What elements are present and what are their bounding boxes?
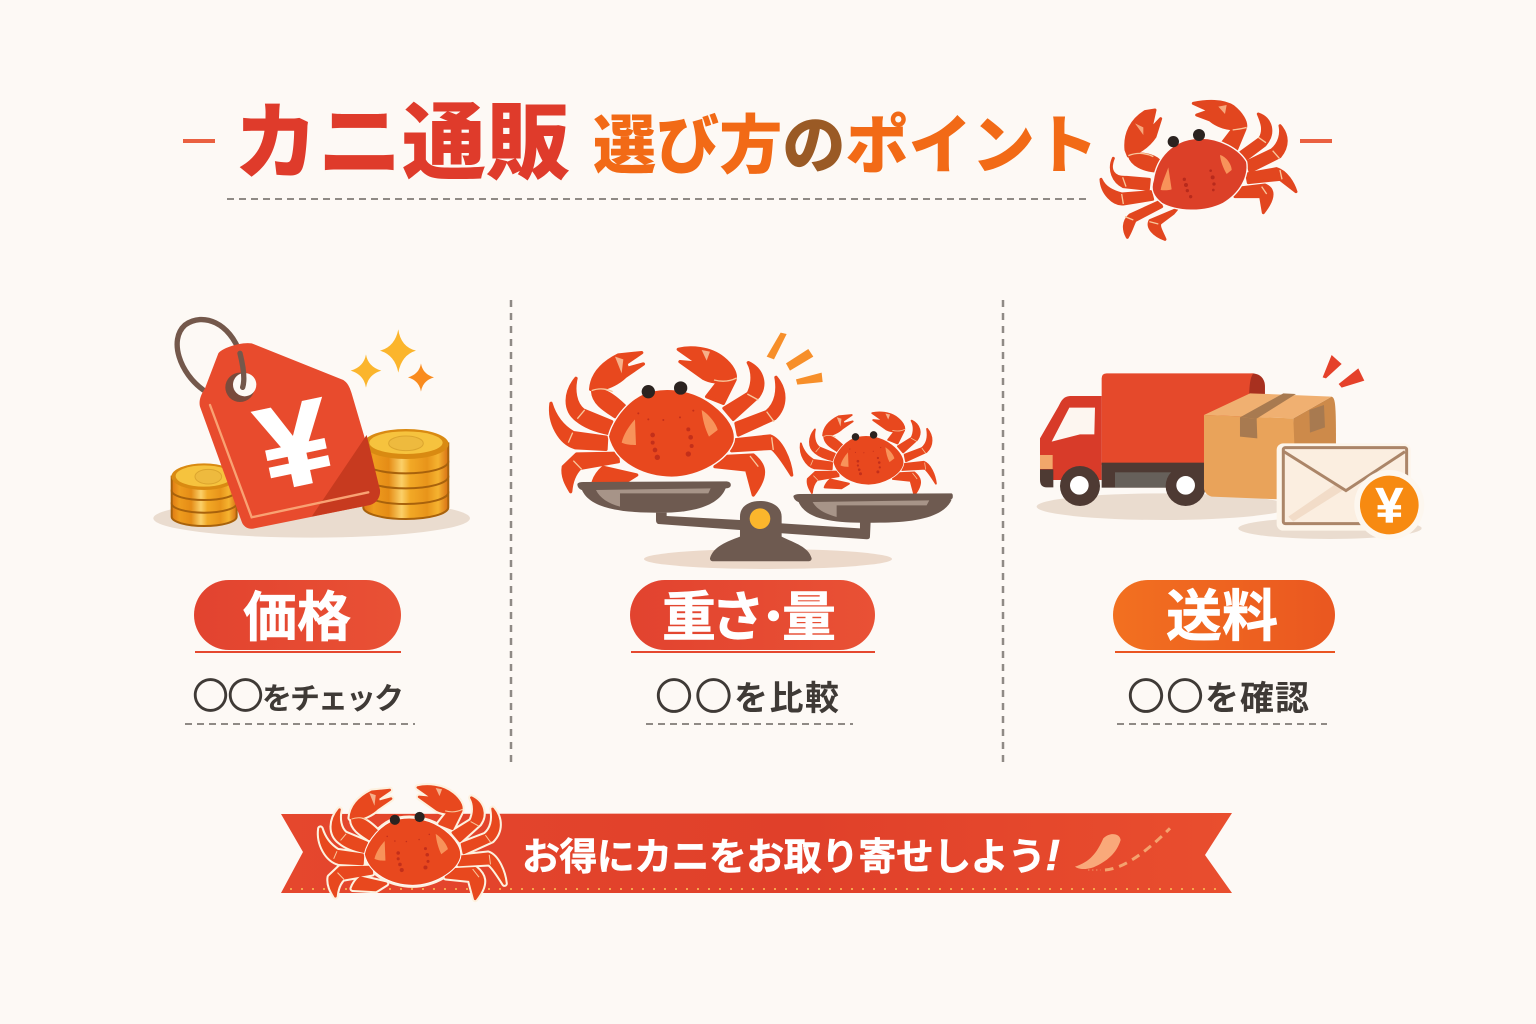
- icon: title crab: [1101, 101, 1296, 239]
- banner: [281, 786, 1232, 899]
- icon: cardboard box: [1204, 393, 1336, 500]
- icon: yen badge: [1354, 470, 1424, 540]
- pill: 送料: [1113, 572, 1335, 653]
- panel: shipping: [1037, 355, 1424, 724]
- text: weight note: 〇〇を比較: [655, 677, 839, 719]
- pill: 価格: [194, 573, 401, 652]
- icon: yen badge: ¥: [1376, 478, 1404, 533]
- ribbon: [281, 813, 1232, 893]
- icon: yen sign: ¥: [247, 373, 343, 516]
- icon: truck, box and envelope: [1037, 355, 1424, 540]
- text: banner message: お得にカニをお取り寄せしよう!: [522, 831, 1060, 880]
- title: main heading カニ通販: カニ通販: [234, 96, 570, 190]
- icon: emphasis marks: [1323, 355, 1364, 388]
- title: sub heading 選び方のポイント: 選び方のポイント: [593, 110, 1098, 182]
- icon: truck: [1040, 373, 1265, 506]
- text: price note: 〇〇をチェック: [192, 676, 404, 717]
- icon: emphasis marks: [767, 333, 823, 385]
- icon: price tag and coins: [153, 320, 470, 538]
- title: [234, 96, 1098, 190]
- icon: scale with crabs: [551, 333, 953, 569]
- pill: 重さ・量: 重さ･量: [662, 573, 836, 652]
- icon: balance scale: [577, 333, 953, 561]
- icon: crab leg with dotted trail: [1075, 828, 1170, 870]
- text: shipping note: 〇〇を確認: [1127, 677, 1309, 719]
- pill: 価格: 価格: [243, 573, 351, 652]
- panel: weight: [551, 333, 953, 724]
- icon: sparkles: [351, 329, 434, 392]
- icon: big crab: [551, 348, 792, 495]
- panel: price: [153, 320, 470, 724]
- icon: envelope: [1277, 443, 1411, 531]
- icon: small crab: [801, 412, 936, 495]
- pill: 送料: 送料: [1166, 572, 1278, 653]
- icon: banner crab: [320, 786, 505, 899]
